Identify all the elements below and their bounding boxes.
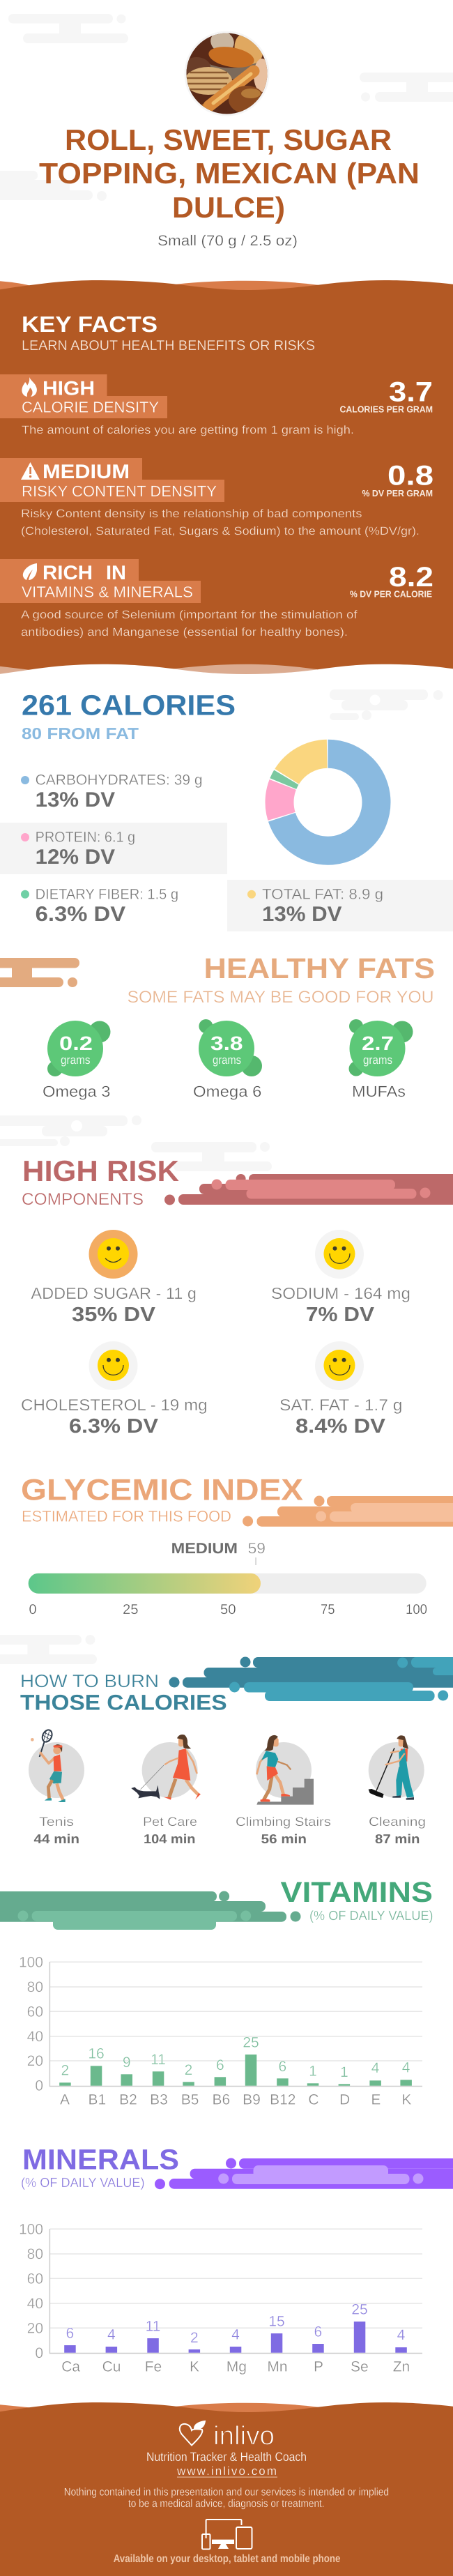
bar chart: minerals: Mg: [227, 2359, 247, 2375]
glycemic index heading: [21, 1474, 303, 1525]
icon: smiley: [89, 1230, 138, 1279]
bar chart: vitamins: 2: [61, 2063, 69, 2079]
legend: total fat: 13% DV: [262, 903, 341, 926]
legend: carbohydrates: CARBOHYDRATES: 39 g: [36, 772, 203, 788]
bar chart: minerals: Fe: [145, 2359, 162, 2375]
title: [39, 123, 420, 224]
key facts heading: LEARN ABOUT HEALTH BENEFITS OR RISKS: [22, 338, 315, 353]
bar chart: vitamins: 1: [340, 2064, 348, 2080]
vitamins heading: [280, 1876, 433, 1923]
bar chart: minerals: 0: [35, 2345, 43, 2361]
background clouds: header: [0, 14, 453, 201]
legend: protein: 12% DV: [36, 846, 115, 869]
high risk heading: HIGH RISK: [22, 1154, 179, 1187]
bar chart: vitamins: 80: [27, 1979, 43, 1995]
background clouds: high risk: [0, 1115, 272, 1171]
fact: medium risky content density: MEDIUM: [43, 461, 130, 483]
bar chart: minerals: Zn: [393, 2359, 410, 2375]
vitamins heading: (% OF DAILY VALUE): [309, 1909, 433, 1923]
bar chart: minerals: Se: [351, 2359, 369, 2375]
bar chart: minerals: 6: [66, 2325, 74, 2341]
bar chart: minerals: 2: [190, 2330, 199, 2346]
icon: woman walking dog: [131, 1735, 201, 1800]
glycemic index gauge: 25: [123, 1602, 138, 1617]
fat badge: omega 6: Omega 6: [193, 1083, 262, 1100]
bar chart: minerals: 4: [107, 2327, 116, 2343]
title: ROLL, SWEET, SUGAR: [65, 123, 392, 156]
bar chart: minerals: 25: [351, 2301, 368, 2317]
fact: rich in vitamins and minerals: [0, 559, 433, 639]
glycemic index heading: GLYCEMIC INDEX: [21, 1474, 303, 1507]
icon: smiley: [315, 1230, 364, 1279]
fat badge: omega 6: [193, 1019, 262, 1100]
fact: high calorie density: CALORIE DENSITY: [22, 399, 159, 416]
risk item: added sugar: 35% DV: [72, 1304, 156, 1326]
activity: cleaning: [369, 1735, 426, 1846]
food photo: bread basket: [183, 28, 270, 116]
fat badge: omega 3: [43, 1021, 110, 1100]
bar chart: minerals: Cu: [102, 2359, 121, 2375]
glycemic index heading: ESTIMATED FOR THIS FOOD: [22, 1508, 231, 1525]
icon: inlivo logo: [180, 2421, 205, 2446]
glycemic index gauge: 75: [321, 1602, 335, 1617]
legend: dietary fiber: [21, 886, 178, 926]
bar chart: vitamins: B3: [150, 2091, 168, 2108]
fat badge: omega 3: Omega 3: [43, 1083, 110, 1100]
icon: tennis player: [31, 1728, 66, 1802]
calories heading: 261 CALORIES: [22, 689, 236, 722]
background cloud: burn calories: [0, 1635, 97, 1664]
icon: devices: [202, 2520, 252, 2549]
minerals heading: (% OF DAILY VALUE): [21, 2176, 145, 2190]
icon: smiley: [89, 1341, 138, 1390]
bar chart: vitamins: 0: [35, 2078, 43, 2094]
fact: medium risky content density: RISKY CONTENT DENSITY: [22, 482, 217, 500]
risk item: cholesterol: 6.3% DV: [69, 1415, 159, 1438]
fact: high calorie density: 3.7: [389, 377, 433, 408]
calories heading: [22, 689, 236, 742]
fact: rich in vitamins and minerals: IN: [106, 562, 126, 584]
minerals heading: MINERALS: [22, 2144, 179, 2176]
fact: rich in vitamins and minerals: RICH: [43, 562, 93, 584]
vitamins heading: VITAMINS: [280, 1876, 433, 1908]
activity: climbing stairs: Climbing Stairs: [236, 1815, 331, 1829]
fat badge: MUFAs: [348, 1019, 413, 1100]
activity: cleaning: Cleaning: [369, 1815, 426, 1829]
risk item: added sugar: ADDED SUGAR - 11 g: [31, 1284, 197, 1302]
bar chart: vitamins: D: [339, 2091, 350, 2108]
glycemic index gauge: MEDIUM: [171, 1540, 238, 1557]
healthy fats heading: HEALTHY FATS: [204, 952, 435, 984]
bar chart: vitamins: 4: [402, 2060, 410, 2076]
glycemic index gauge: 59: [248, 1540, 266, 1557]
bar chart: minerals: K: [190, 2359, 199, 2375]
risk item: cholesterol: CHOLESTEROL - 19 mg: [21, 1396, 208, 1414]
fact: medium risky content density: % DV PER GRAM: [362, 488, 433, 498]
risk item: saturated fat: [279, 1341, 403, 1438]
tagline: Nutrition Tracker & Health Coach: [146, 2450, 307, 2464]
bar chart: vitamins: 40: [27, 2029, 43, 2045]
bar chart: vitamins: 11: [151, 2052, 166, 2068]
bar chart: minerals: 4: [397, 2327, 406, 2343]
fact: rich in vitamins and minerals: VITAMINS & MINERALS: [22, 584, 193, 601]
bar chart: vitamins: B6: [213, 2091, 230, 2108]
activity: tennis: Tenis: [39, 1815, 74, 1829]
glycemic index gauge: 50: [220, 1602, 236, 1617]
background cloud: calories: [330, 689, 443, 720]
fat badge: omega 3: grams: [61, 1053, 91, 1067]
activity: tennis: 44 min: [33, 1831, 79, 1846]
bar chart: minerals: 15: [268, 2314, 285, 2330]
bar chart: minerals: [19, 2222, 422, 2375]
bar chart: vitamins: 100: [19, 1955, 43, 1971]
bar chart: minerals: Ca: [61, 2359, 80, 2375]
key facts heading: [22, 312, 315, 353]
fact: rich in vitamins and minerals: % DV PER CALORIE: [350, 589, 432, 600]
icon: woman climbing stairs: [256, 1735, 314, 1805]
fact: high calorie density: [0, 374, 433, 436]
bar chart: minerals: Mn: [267, 2359, 288, 2375]
risk item: cholesterol: [21, 1341, 208, 1438]
bar chart: vitamins: C: [308, 2091, 319, 2108]
legend: protein: PROTEIN: 6.1 g: [36, 830, 135, 846]
fact: medium risky content density: 0.8: [387, 460, 433, 491]
bar chart: minerals: 6: [314, 2324, 322, 2340]
bar chart: minerals: 100: [19, 2222, 43, 2238]
bar chart: vitamins: 9: [123, 2055, 131, 2071]
legend: total fat: TOTAL FAT: 8.9 g: [262, 886, 383, 902]
bar chart: vitamins: 20: [27, 2053, 43, 2069]
bar chart: vitamins: B9: [243, 2091, 261, 2108]
footer panel: [0, 2402, 453, 2576]
high risk heading: COMPONENTS: [22, 1190, 144, 1209]
panel: key facts: [0, 280, 453, 674]
how to burn heading: HOW TO BURN: [20, 1670, 159, 1691]
decorative bars: glycemic index: [243, 1496, 453, 1527]
decorative bars: healthy fats: [0, 958, 79, 987]
fat badge: omega 6: 3.8: [210, 1032, 243, 1054]
fat badge: omega 3: 0.2: [59, 1032, 93, 1054]
bar chart: vitamins: [19, 1955, 422, 2108]
glycemic index gauge: 0: [29, 1602, 36, 1617]
high risk heading: [22, 1154, 179, 1209]
fact: medium risky content density: (Cholesterol, Saturated Fat, Sugars & Sodium) to the amount (%DV/gr).: [21, 525, 420, 538]
title: DULCE): [172, 191, 285, 224]
fat badge: MUFAs: MUFAs: [352, 1083, 406, 1100]
fat badge: MUFAs: 2.7: [362, 1032, 394, 1054]
decorative bars: burn calories: [169, 1656, 453, 1701]
bar chart: vitamins: K: [401, 2091, 411, 2108]
risk item: sodium: 7% DV: [306, 1304, 375, 1326]
bar chart: vitamins: 1: [309, 2064, 317, 2080]
bar chart: vitamins: 6: [216, 2057, 224, 2073]
activity: pet care: [131, 1735, 201, 1846]
bar chart: vitamins: 25: [243, 2035, 259, 2051]
activity: climbing stairs: [236, 1735, 331, 1846]
how to burn heading: THOSE CALORIES: [20, 1691, 227, 1715]
donut chart: macronutrients: [279, 754, 376, 851]
bar chart: minerals: 80: [27, 2246, 43, 2262]
legend: protein: [0, 823, 227, 874]
bar chart: vitamins: E: [371, 2091, 381, 2108]
risk item: saturated fat: SAT. FAT - 1.7 g: [279, 1396, 403, 1414]
bar chart: vitamins: B12: [270, 2091, 295, 2108]
disclaimer: Nothing contained in this presentation and our services is intended or implied: [64, 2486, 389, 2498]
brand name: inlivo: [213, 2422, 275, 2451]
fact: medium risky content density: [0, 458, 433, 538]
minerals heading: [21, 2144, 179, 2190]
fact: rich in vitamins and minerals: antibodies) and Manganese (essential for healthy bones).: [21, 626, 348, 639]
bar chart: vitamins: B5: [181, 2091, 199, 2108]
healthy fats heading: [127, 952, 435, 1007]
bar chart: minerals: 40: [27, 2296, 43, 2312]
healthy fats heading: SOME FATS MAY BE GOOD FOR YOU: [127, 988, 433, 1007]
risk item: saturated fat: 8.4% DV: [295, 1415, 386, 1438]
decorative bars: high risk: [164, 1174, 453, 1205]
glycemic index gauge: 100: [406, 1602, 427, 1617]
disclaimer: [64, 2486, 389, 2510]
fat badge: MUFAs: grams: [363, 1053, 392, 1067]
bar chart: vitamins: A: [60, 2091, 70, 2108]
glycemic index gauge: [29, 1540, 427, 1617]
bar chart: minerals: P: [314, 2359, 323, 2375]
activity: pet care: Pet Care: [143, 1815, 197, 1829]
icon: warning triangle: [21, 462, 40, 480]
risk item: sodium: SODIUM - 164 mg: [271, 1284, 410, 1302]
bar chart: vitamins: 60: [27, 2004, 43, 2020]
serving size: Small (70 g / 2.5 oz): [158, 233, 298, 249]
bar chart: minerals: 11: [146, 2318, 160, 2334]
bar chart: vitamins: 2: [185, 2062, 192, 2078]
decorative bars: minerals: [155, 2158, 453, 2189]
availability note: Available on your desktop, tablet and mobile phone: [114, 2553, 341, 2565]
legend: total fat: [227, 880, 453, 931]
fat badge: omega 6: grams: [213, 1053, 241, 1067]
key facts heading: KEY FACTS: [22, 312, 158, 337]
legend: dietary fiber: 6.3% DV: [36, 903, 125, 926]
activity: cleaning: 87 min: [375, 1831, 420, 1846]
website link: www.inlivo.com: [176, 2464, 277, 2478]
risk item: added sugar: [31, 1230, 197, 1326]
bar chart: vitamins: 4: [371, 2060, 380, 2076]
activity: climbing stairs: 56 min: [261, 1831, 307, 1846]
bar chart: minerals: 60: [27, 2271, 43, 2287]
activity: tennis: [29, 1728, 84, 1846]
icon: leaf: [23, 563, 37, 580]
bar chart: vitamins: B2: [119, 2091, 137, 2108]
title: TOPPING, MEXICAN (PAN: [39, 157, 420, 190]
activity: pet care: 104 min: [144, 1831, 195, 1846]
bar chart: vitamins: 6: [279, 2059, 286, 2075]
icon: woman sweeping: [369, 1735, 414, 1800]
calories heading: 80 FROM FAT: [22, 724, 139, 742]
fact: high calorie density: CALORIES PER GRAM: [340, 404, 433, 414]
legend: dietary fiber: DIETARY FIBER: 1.5 g: [36, 886, 178, 902]
fact: medium risky content density: Risky Content density is the relationship of bad components: [21, 508, 362, 520]
legend: carbohydrates: [21, 772, 203, 811]
bar chart: minerals: 20: [27, 2320, 43, 2337]
bar chart: vitamins: B1: [89, 2091, 106, 2108]
bar chart: vitamins: 16: [88, 2046, 105, 2062]
decorative bars: vitamins: [0, 1891, 301, 1930]
fact: rich in vitamins and minerals: A good source of Selenium (important for the stimulation of: [21, 609, 358, 621]
legend: carbohydrates: 13% DV: [36, 788, 115, 811]
icon: flame: [22, 377, 37, 397]
icon: smiley: [315, 1341, 364, 1390]
fact: high calorie density: The amount of calories you are getting from 1 gram is high.: [22, 424, 354, 436]
fact: rich in vitamins and minerals: 8.2: [389, 562, 433, 593]
disclaimer: to be a medical advice, diagnosis or treatment.: [128, 2498, 325, 2510]
how to burn heading: [20, 1670, 227, 1715]
fact: high calorie density: HIGH: [43, 377, 95, 399]
risk item: sodium: [271, 1230, 410, 1326]
bar chart: minerals: 4: [231, 2327, 240, 2343]
